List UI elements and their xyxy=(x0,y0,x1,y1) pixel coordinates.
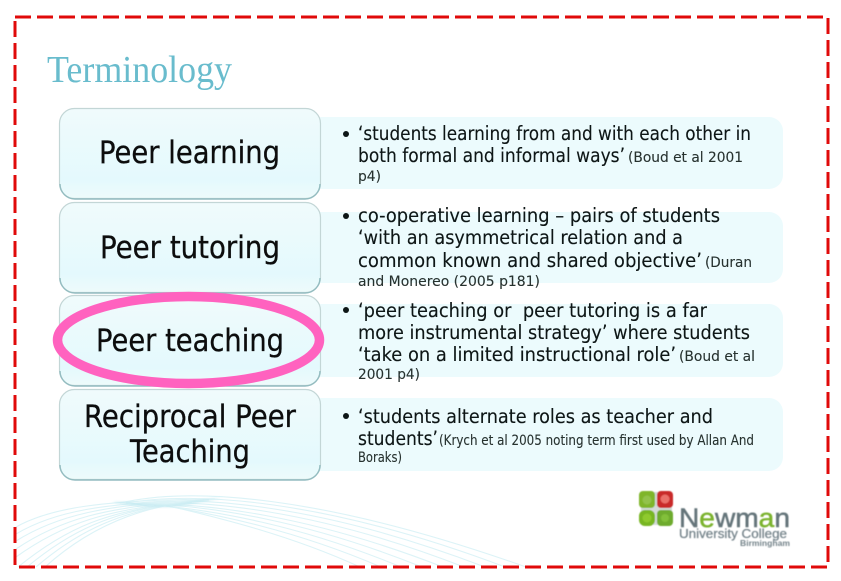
highlight ellipse around Peer teaching xyxy=(58,296,320,384)
definition 2 text: ‘with an asymmetrical relation and a xyxy=(358,226,683,249)
definition 4 bullet xyxy=(343,413,349,419)
term box: Peer tutoring xyxy=(60,202,320,293)
definition 1 text: p4) xyxy=(358,169,381,185)
definition 3 text xyxy=(358,299,755,383)
definition 3 text: ‘take on a limited instructional role’ xyxy=(358,343,676,366)
term box: Peer learning: Peer learning xyxy=(99,135,280,171)
term box: Reciprocal Peer Teaching: Teaching xyxy=(129,434,250,470)
definition 3 text: 2001 p4) xyxy=(358,367,420,383)
definition 2 bullet xyxy=(343,213,349,219)
term box: Reciprocal Peer Teaching: Reciprocal Peer xyxy=(84,399,296,435)
term box: Reciprocal Peer Teaching xyxy=(60,390,320,480)
definition 4 text: ‘students alternate roles as teacher and xyxy=(358,405,713,428)
definition 1 text xyxy=(358,122,751,185)
definition 4 text: (Krych et al 2005 noting term first used by Allan And xyxy=(439,433,754,449)
panel: definition 4 xyxy=(300,398,783,471)
panel: definition 3 xyxy=(300,299,783,383)
definition 1 bullet xyxy=(343,131,349,137)
wave highlight xyxy=(112,498,222,507)
logo icon: four leaves xyxy=(639,491,673,526)
logo: Newman University College xyxy=(639,491,790,548)
panel: definition 2 xyxy=(300,204,783,290)
term box: Peer teaching xyxy=(60,296,320,386)
definition 4 text xyxy=(358,405,754,466)
term box: Peer learning xyxy=(60,108,320,199)
background wave pattern xyxy=(16,496,526,567)
definition 3 text: ‘peer teaching or peer tutoring is a far xyxy=(358,299,708,322)
logo subtitle: University College xyxy=(679,527,787,541)
definition 1 text: ‘students learning from and with each other in xyxy=(358,122,751,145)
term box: Peer teaching: Peer teaching xyxy=(96,323,284,359)
term box: Peer tutoring: Peer tutoring xyxy=(100,230,280,266)
definition 2 text: and Monereo (2005 p181) xyxy=(358,274,540,290)
definition 4 text: Boraks) xyxy=(358,450,402,466)
logo wordmark: Newman xyxy=(679,503,790,533)
definition 1 text: both formal and informal ways’ xyxy=(358,144,625,167)
logo location: Birmingham xyxy=(740,539,790,548)
definition 3 bullet xyxy=(343,307,349,313)
definition 1 text: (Boud et al 2001 xyxy=(628,150,743,166)
definition 2 text: co-operative learning – pairs of students xyxy=(358,204,720,227)
definition 3 text: (Boud et al xyxy=(679,349,755,365)
definition 2 text xyxy=(358,204,752,290)
definition 3 text: more instrumental strategy’ where students xyxy=(358,321,750,344)
definition 2 text: common known and shared objective’ xyxy=(358,249,702,272)
definition 2 text: (Duran xyxy=(705,255,752,271)
title: Terminology xyxy=(47,49,232,91)
panel: definition 1 xyxy=(300,117,783,189)
definition 4 text: students’ xyxy=(358,427,438,450)
